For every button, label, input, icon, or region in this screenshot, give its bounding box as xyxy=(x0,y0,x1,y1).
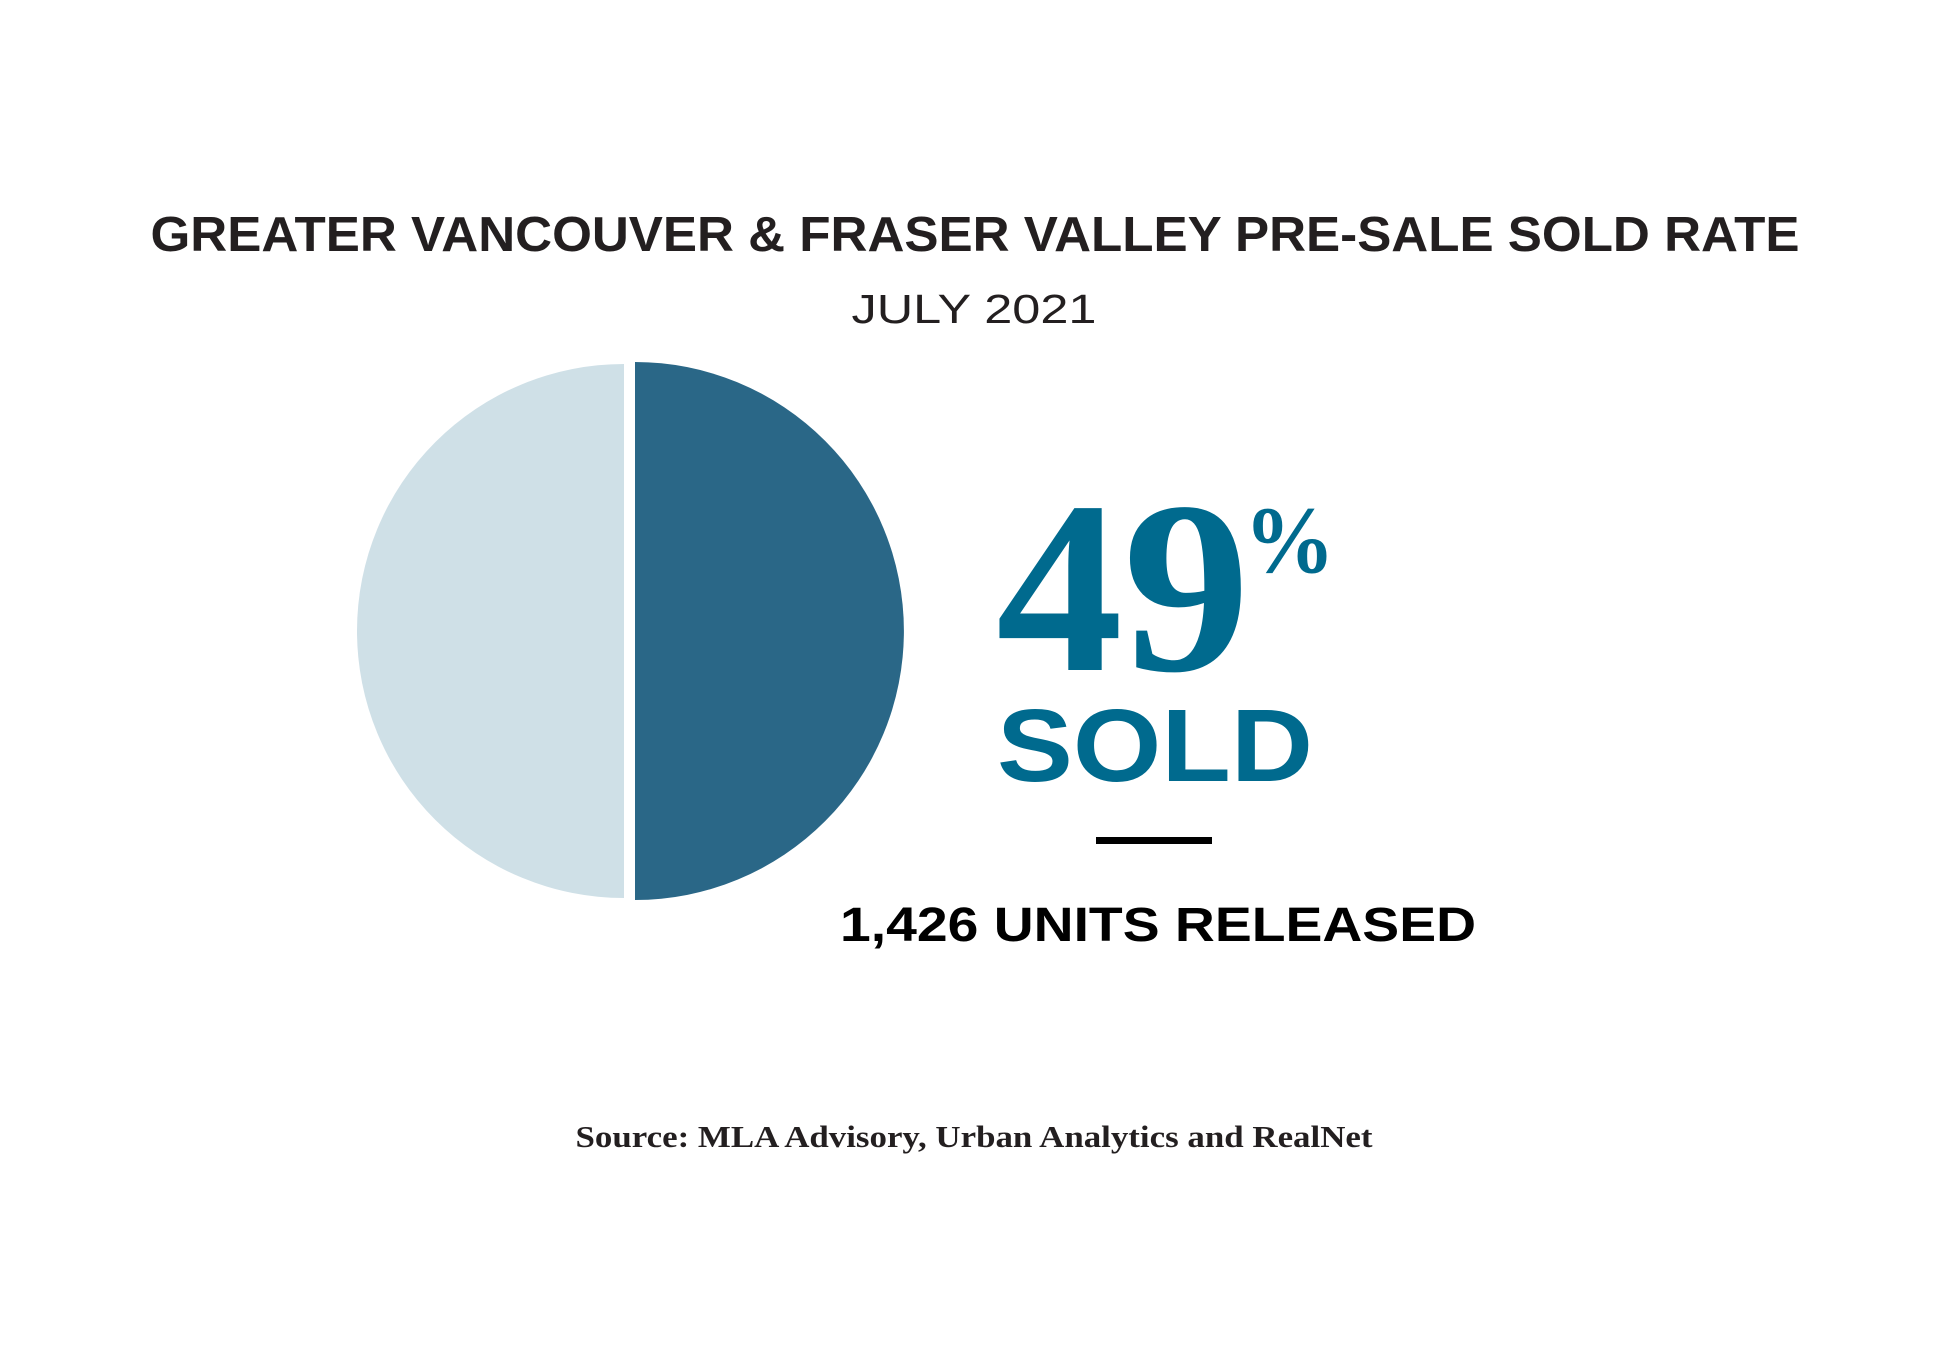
title: GREATER VANCOUVER & FRASER VALLEY PRE-SALE SOLD RATE xyxy=(150,208,1800,262)
sold slice xyxy=(635,362,904,900)
big percentage: % xyxy=(1244,487,1335,593)
unsold slice xyxy=(357,364,624,898)
pie chart xyxy=(357,362,904,900)
sold label: SOLD xyxy=(997,688,1313,803)
source: Source: MLA Advisory, Urban Analytics and RealNet xyxy=(576,1119,1373,1154)
units released: 1,426 UNITS RELEASED xyxy=(840,899,1476,952)
subtitle: JULY 2021 xyxy=(852,286,1096,332)
big percentage: 49 xyxy=(996,452,1250,724)
